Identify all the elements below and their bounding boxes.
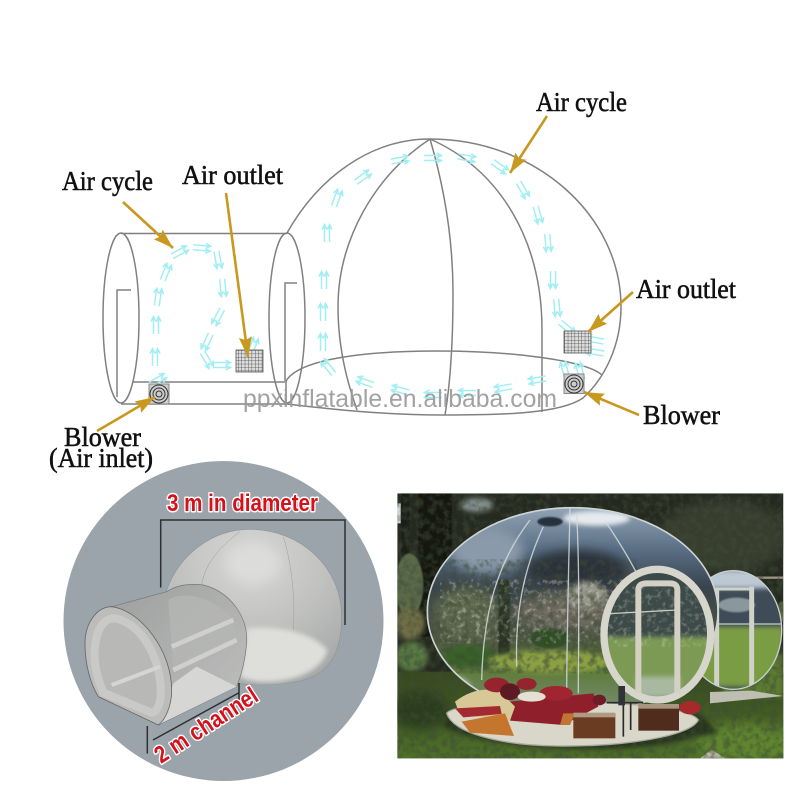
dome [167,529,342,685]
dimension bracket: channel [147,683,239,754]
dome highlight [227,543,280,583]
blower fan, dome [564,374,584,394]
dome floor [240,628,327,682]
panel: photo of bubble tent [390,493,797,763]
rear bubble outline and base [702,570,783,704]
grass [390,653,797,763]
arrow: air outlet right [588,292,633,332]
dimension bracket: diameter [161,520,345,625]
front face floor beam [112,667,160,685]
panel: 3D model dimensions [64,461,384,781]
door ring [604,569,711,700]
beds and cushions [455,678,701,736]
door frame [638,583,677,693]
wooden crates and table [573,686,679,738]
label: blower left: Blower [64,422,141,452]
label: air outlet left: Air outlet [182,160,283,190]
tunnel rear panel [168,595,237,667]
air outlet grille, tunnel [236,350,263,372]
arrow: blower right [584,392,639,415]
grey circle backdrop [64,461,384,781]
front face inflated frame [95,618,161,713]
tunnel floor [160,667,237,724]
dome seam [202,532,294,630]
small rear bubble [703,571,781,689]
3D model [85,529,342,725]
arrow: air cycle left [123,202,173,248]
tunnel interior beams [172,620,237,670]
label: air cycle right: Air cycle [536,87,627,117]
diagram: tunnel and dome air circulation [49,87,736,473]
dome outline [286,139,621,415]
main bubble outline [427,508,718,716]
label: air outlet right: Air outlet [636,274,736,304]
view through door ring [608,573,707,696]
main bubble interior [428,508,718,704]
arrow: air outlet left [226,193,248,357]
blower fan, tunnel [149,384,169,404]
air outlet grille, dome [564,331,591,353]
tunnel front face [85,607,172,725]
airflow arrows [148,152,605,400]
tree background [395,493,787,758]
label: blower right: Blower [643,400,720,430]
foliage speckle [440,580,627,643]
arrow: air cycle right [510,116,547,173]
label: air cycle left: Air cycle [62,166,153,196]
dark mottling over background [397,493,783,758]
arrow: blower left [97,397,155,431]
label: 3 m in diameter: 3 m in diameter [167,490,318,517]
label: air inlet: (Air inlet) [49,443,153,473]
tunnel body [112,584,247,725]
watermark: ppxinflatable.en.alibaba.com [243,385,557,413]
label: 2 m channel: 2 m channel [150,682,263,769]
floor platform [447,702,698,746]
tunnel outline [103,233,305,404]
